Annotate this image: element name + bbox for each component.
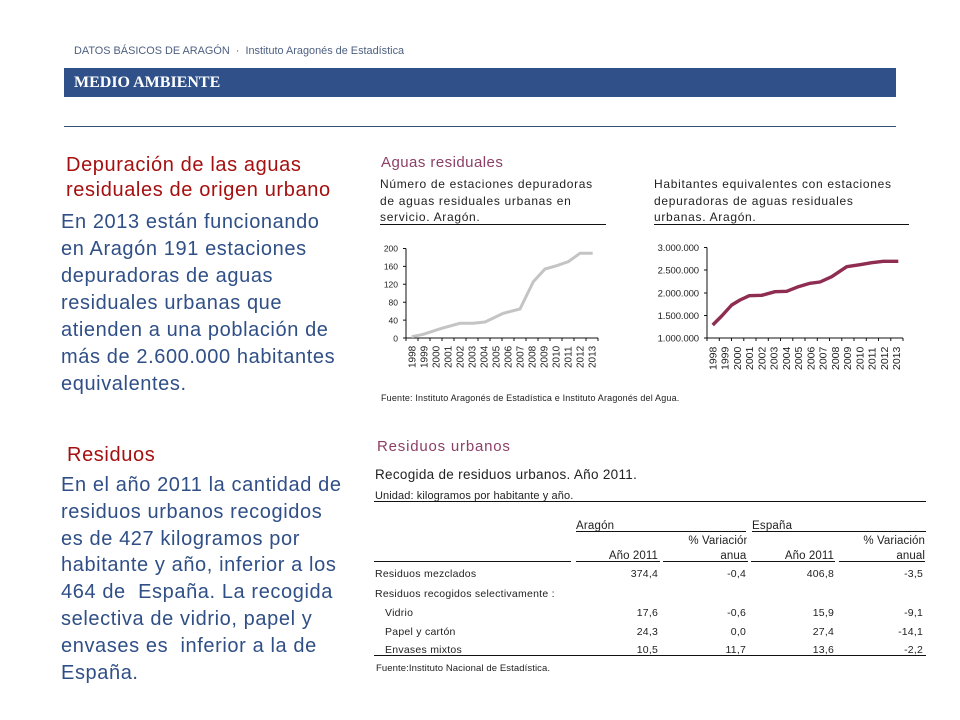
line chart: stations: 200 xyxy=(384,244,398,254)
heading: wastewater treatment xyxy=(66,154,331,201)
text block: waste: es de 427 kilogramos por xyxy=(61,528,300,550)
heading: wastewater treatment: Depuración de las aguas xyxy=(66,154,302,176)
table: urban waste collection: -0,4 xyxy=(727,568,746,580)
table: urban waste collection: 24,3 xyxy=(637,626,658,638)
table: urban waste collection: -9,1 xyxy=(904,607,923,619)
line chart: stations: 2010 xyxy=(552,345,562,368)
line chart: population equivalent: 2000 xyxy=(732,346,744,370)
table: urban waste collection: Año 2011 xyxy=(609,550,658,562)
chart title: population equivalent xyxy=(654,176,909,225)
table: urban waste collection: 15,9 xyxy=(813,607,834,619)
table: urban waste collection: 374,4 xyxy=(631,568,658,580)
text block: wastewater: depuradoras de aguas xyxy=(61,265,273,287)
banner: Medio Ambiente: MEDIO AMBIENTE xyxy=(74,74,220,91)
table title: Recogida de residuos urbanos. Año 2011. xyxy=(375,467,637,482)
table: urban waste collection: anual xyxy=(896,550,925,562)
chart title: stations: servicio. Aragón. xyxy=(380,210,480,224)
chart title: population equivalent: Habitantes equivalentes con estaciones xyxy=(654,177,892,191)
text block: waste xyxy=(61,474,342,684)
line chart: population equivalent: 2001 xyxy=(744,346,756,370)
chart source note: Fuente: Instituto Aragonés de Estadística e Instituto Aragonés del Agua. xyxy=(381,393,679,403)
heading: wastewater treatment: residuales de origen urbano xyxy=(66,179,331,201)
line chart: population equivalent: 2.000.000 xyxy=(658,288,699,299)
chart title: stations: de aguas residuales urbanas en xyxy=(380,194,572,208)
text block: waste: habitante y año, inferior a los xyxy=(61,554,336,576)
table: urban waste collection: -0,6 xyxy=(727,607,746,619)
table: urban waste collection: % Variación xyxy=(688,535,750,547)
line chart: stations: 2012 xyxy=(576,345,586,368)
line chart: stations: 2000 xyxy=(432,345,442,368)
chart title: stations: Número de estaciones depuradoras xyxy=(380,177,593,191)
line chart: stations: 2006 xyxy=(504,345,514,368)
table: urban waste collection: -2,2 xyxy=(904,644,923,656)
text block: wastewater: equivalentes. xyxy=(61,373,187,395)
line chart: stations: 2009 xyxy=(540,345,550,368)
line chart: stations: 1999 xyxy=(420,345,430,368)
line chart: population equivalent: 2009 xyxy=(842,346,854,370)
line chart: stations: 40 xyxy=(389,316,398,326)
table: urban waste collection: Residuos mezclados xyxy=(375,568,476,580)
line chart: stations: 2013 xyxy=(588,345,598,368)
text block: wastewater: atienden a una población de xyxy=(61,319,329,341)
text block: waste: residuos urbanos recogidos xyxy=(61,501,322,523)
chart title: stations xyxy=(380,176,606,225)
table source note: Fuente:Instituto Nacional de Estadística. xyxy=(376,663,550,674)
text block: waste: 464 de España. La recogida xyxy=(61,581,333,603)
chart title: population equivalent: depuradoras de aguas residuales xyxy=(654,194,854,208)
table: urban waste collection: Unidad: kilogramos por habitante y año. xyxy=(375,490,573,502)
line chart: stations: 2011 xyxy=(564,346,574,368)
table: urban waste collection: Residuos recogidos selectivamente : xyxy=(375,588,555,600)
table: urban waste collection: Aragón xyxy=(576,520,614,532)
table: urban waste collection: -14,1 xyxy=(898,626,923,638)
line chart: population equivalent: 2013 xyxy=(891,346,903,370)
line chart: stations: 80 xyxy=(389,298,398,308)
line chart: stations: 2005 xyxy=(492,345,502,368)
table: urban waste collection: 27,4 xyxy=(813,626,834,638)
table: urban waste collection: Papel y cartón xyxy=(385,626,456,638)
line chart: population equivalent: 1998 xyxy=(708,346,720,370)
line chart: population equivalent: 3.000.000 xyxy=(658,243,699,254)
line chart: population equivalent: 1.000.000 xyxy=(658,333,699,344)
line chart: stations: 2007 xyxy=(516,345,526,368)
banner: Medio Ambiente xyxy=(64,68,896,97)
text block: waste: selectiva de vidrio, papel y xyxy=(61,608,312,630)
line chart: population equivalent: 2012 xyxy=(879,346,891,370)
line chart: population equivalent: 2008 xyxy=(830,346,842,370)
line chart: population equivalent: 1.500.000 xyxy=(658,311,699,322)
table: urban waste collection: 17,6 xyxy=(637,607,658,619)
text block: wastewater xyxy=(61,211,335,395)
line chart: stations: 2004 xyxy=(480,345,490,368)
table: urban waste collection: España xyxy=(752,520,793,532)
table: urban waste collection: Envases mixtos xyxy=(385,644,462,656)
line chart: population equivalent: 2010 xyxy=(854,346,866,370)
table: urban waste collection: 406,8 xyxy=(807,568,834,580)
source line: DATOS BÁSICOS DE ARAGÓN · Instituto Aragonés de Estadística xyxy=(74,45,404,57)
text block: wastewater: más de 2.600.000 habitantes xyxy=(61,346,335,368)
line chart: stations: 2003 xyxy=(468,345,478,368)
heading: waste: Residuos xyxy=(67,444,155,466)
table: urban waste collection: Año 2011 xyxy=(785,550,834,562)
text block: waste: En el año 2011 la cantidad de xyxy=(61,474,342,496)
text block: wastewater: residuales urbanas que xyxy=(61,292,282,314)
line chart: population equivalent: 2007 xyxy=(818,346,830,370)
table: urban waste collection: 0,0 xyxy=(731,626,746,638)
line chart: population equivalent: 2.500.000 xyxy=(658,265,699,276)
table: urban waste collection: Vidrio xyxy=(385,607,413,619)
line chart: population equivalent: 2002 xyxy=(756,346,768,370)
line chart: population equivalent: 2004 xyxy=(781,346,793,370)
text block: wastewater: en Aragón 191 estaciones xyxy=(61,238,307,260)
line chart: stations: 120 xyxy=(384,280,398,290)
line chart: population equivalent: 2006 xyxy=(806,346,818,370)
text block: waste: envases es inferior a la de xyxy=(61,635,317,657)
text block: wastewater: En 2013 están funcionando xyxy=(61,211,320,233)
table: urban waste collection: 10,5 xyxy=(637,644,658,656)
line chart: population equivalent: 2005 xyxy=(793,346,805,370)
line chart: stations: 0 xyxy=(393,334,398,344)
header rule xyxy=(64,126,896,127)
table: urban waste collection: -3,5 xyxy=(904,568,923,580)
table: urban waste collection: % Variación xyxy=(863,535,925,547)
line chart: stations: 1998 xyxy=(408,345,418,368)
line chart: population equivalent: 2011 xyxy=(866,347,878,370)
line chart: stations: 160 xyxy=(384,262,398,272)
table: urban waste collection: 13,6 xyxy=(813,644,834,656)
line chart: stations: 2002 xyxy=(456,345,466,368)
section heading: Residuos urbanos: Residuos urbanos xyxy=(377,438,511,455)
chart title: population equivalent: urbanas. Aragón. xyxy=(654,210,756,224)
section heading: Aguas residuales: Aguas residuales xyxy=(381,154,503,171)
line chart: population equivalent: 1999 xyxy=(720,346,732,370)
line chart: stations: 2008 xyxy=(528,345,538,368)
text block: waste: España. xyxy=(61,662,139,684)
line chart: stations: 2001 xyxy=(444,345,454,368)
table: urban waste collection: 11,7 xyxy=(726,644,746,656)
line chart: population equivalent: 2003 xyxy=(768,346,780,370)
table: urban waste collection: anual xyxy=(720,550,749,562)
